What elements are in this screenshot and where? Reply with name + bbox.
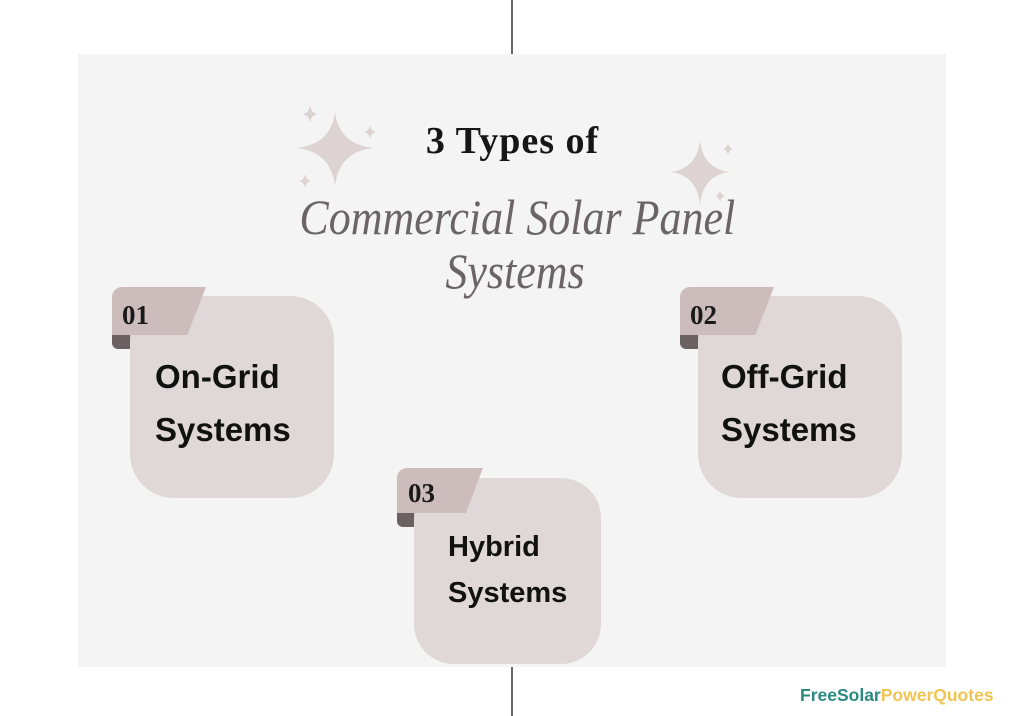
footer logo: FreeSolarPowerQuotes <box>800 685 994 705</box>
number 02: 02 <box>690 300 717 330</box>
label: Off-Grid <box>721 358 847 395</box>
card 02 <box>680 287 902 498</box>
subtitle script: Commercial Solar Panel <box>299 189 735 245</box>
icon: sparkles left <box>298 106 376 188</box>
label <box>448 531 567 609</box>
title: 3 Types of <box>426 120 599 162</box>
label: Systems <box>448 577 567 609</box>
subtitle script <box>299 189 735 299</box>
number 03: 03 <box>408 478 435 508</box>
label: Hybrid <box>448 531 540 563</box>
label: Systems <box>155 411 291 448</box>
card 01 <box>112 287 334 498</box>
label: Systems <box>721 411 857 448</box>
number 01: 01 <box>122 300 149 330</box>
icon: sparkles right <box>671 141 732 204</box>
label: On-Grid <box>155 358 280 395</box>
label <box>155 358 291 448</box>
subtitle script: Systems <box>445 243 585 299</box>
background panel <box>78 54 946 667</box>
card 03 <box>397 468 601 664</box>
top connector line <box>511 0 513 54</box>
bottom connector line <box>511 667 513 716</box>
label <box>721 358 857 448</box>
